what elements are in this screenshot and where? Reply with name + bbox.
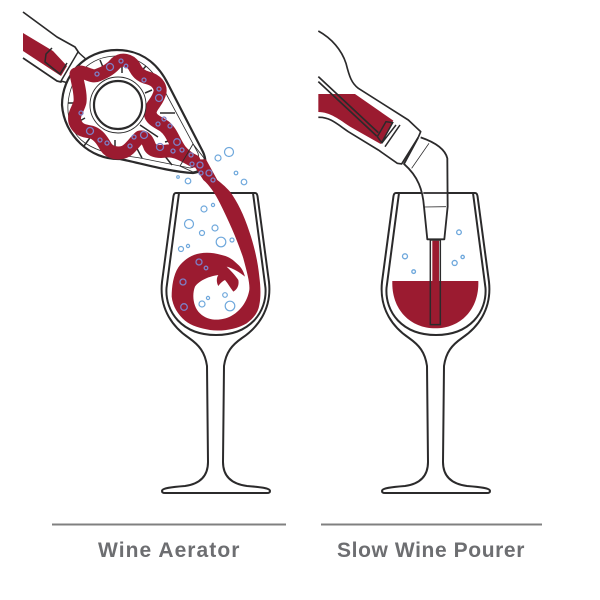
- slow pourer and bottle: [318, 31, 478, 328]
- aerator outer shell: [62, 50, 205, 173]
- wine stream and swirl: [172, 159, 260, 331]
- neck outline: [23, 12, 79, 82]
- bubbles: aerator side: [177, 148, 247, 311]
- wine channel: [75, 60, 194, 161]
- bottle neck: aerator side: [23, 12, 79, 82]
- hollow centre ring: [90, 77, 146, 133]
- aerator fins: [68, 60, 180, 165]
- wine in the neck: [23, 33, 67, 76]
- bottle outline: [318, 31, 421, 164]
- aerator tip: [180, 144, 204, 172]
- bubbles: inside wine: [79, 59, 215, 310]
- label: slow wine pourer: Slow Wine Pourer: [337, 539, 525, 562]
- aerator inner shell: [68, 56, 199, 168]
- wine glass: aerator side: [162, 193, 270, 493]
- wine column: [432, 241, 439, 282]
- pourer collar: [377, 122, 400, 147]
- aerator connector: [61, 52, 88, 84]
- pourer spout: [404, 137, 448, 239]
- spout detail lines: [412, 143, 446, 207]
- tube: [430, 240, 440, 325]
- label: wine aerator: Wine Aerator: [98, 539, 240, 562]
- divider: wine aerator: [52, 524, 286, 526]
- glass rim redraw: [423, 190, 447, 195]
- divider: slow wine pourer: [321, 524, 542, 526]
- wine glass: slow pourer side: [382, 193, 490, 493]
- neck cap: [45, 48, 67, 74]
- bubbles: pourer side: [402, 230, 464, 273]
- wine level: [392, 281, 478, 328]
- aerator body: [61, 50, 205, 173]
- wine in the bottle: [318, 94, 393, 144]
